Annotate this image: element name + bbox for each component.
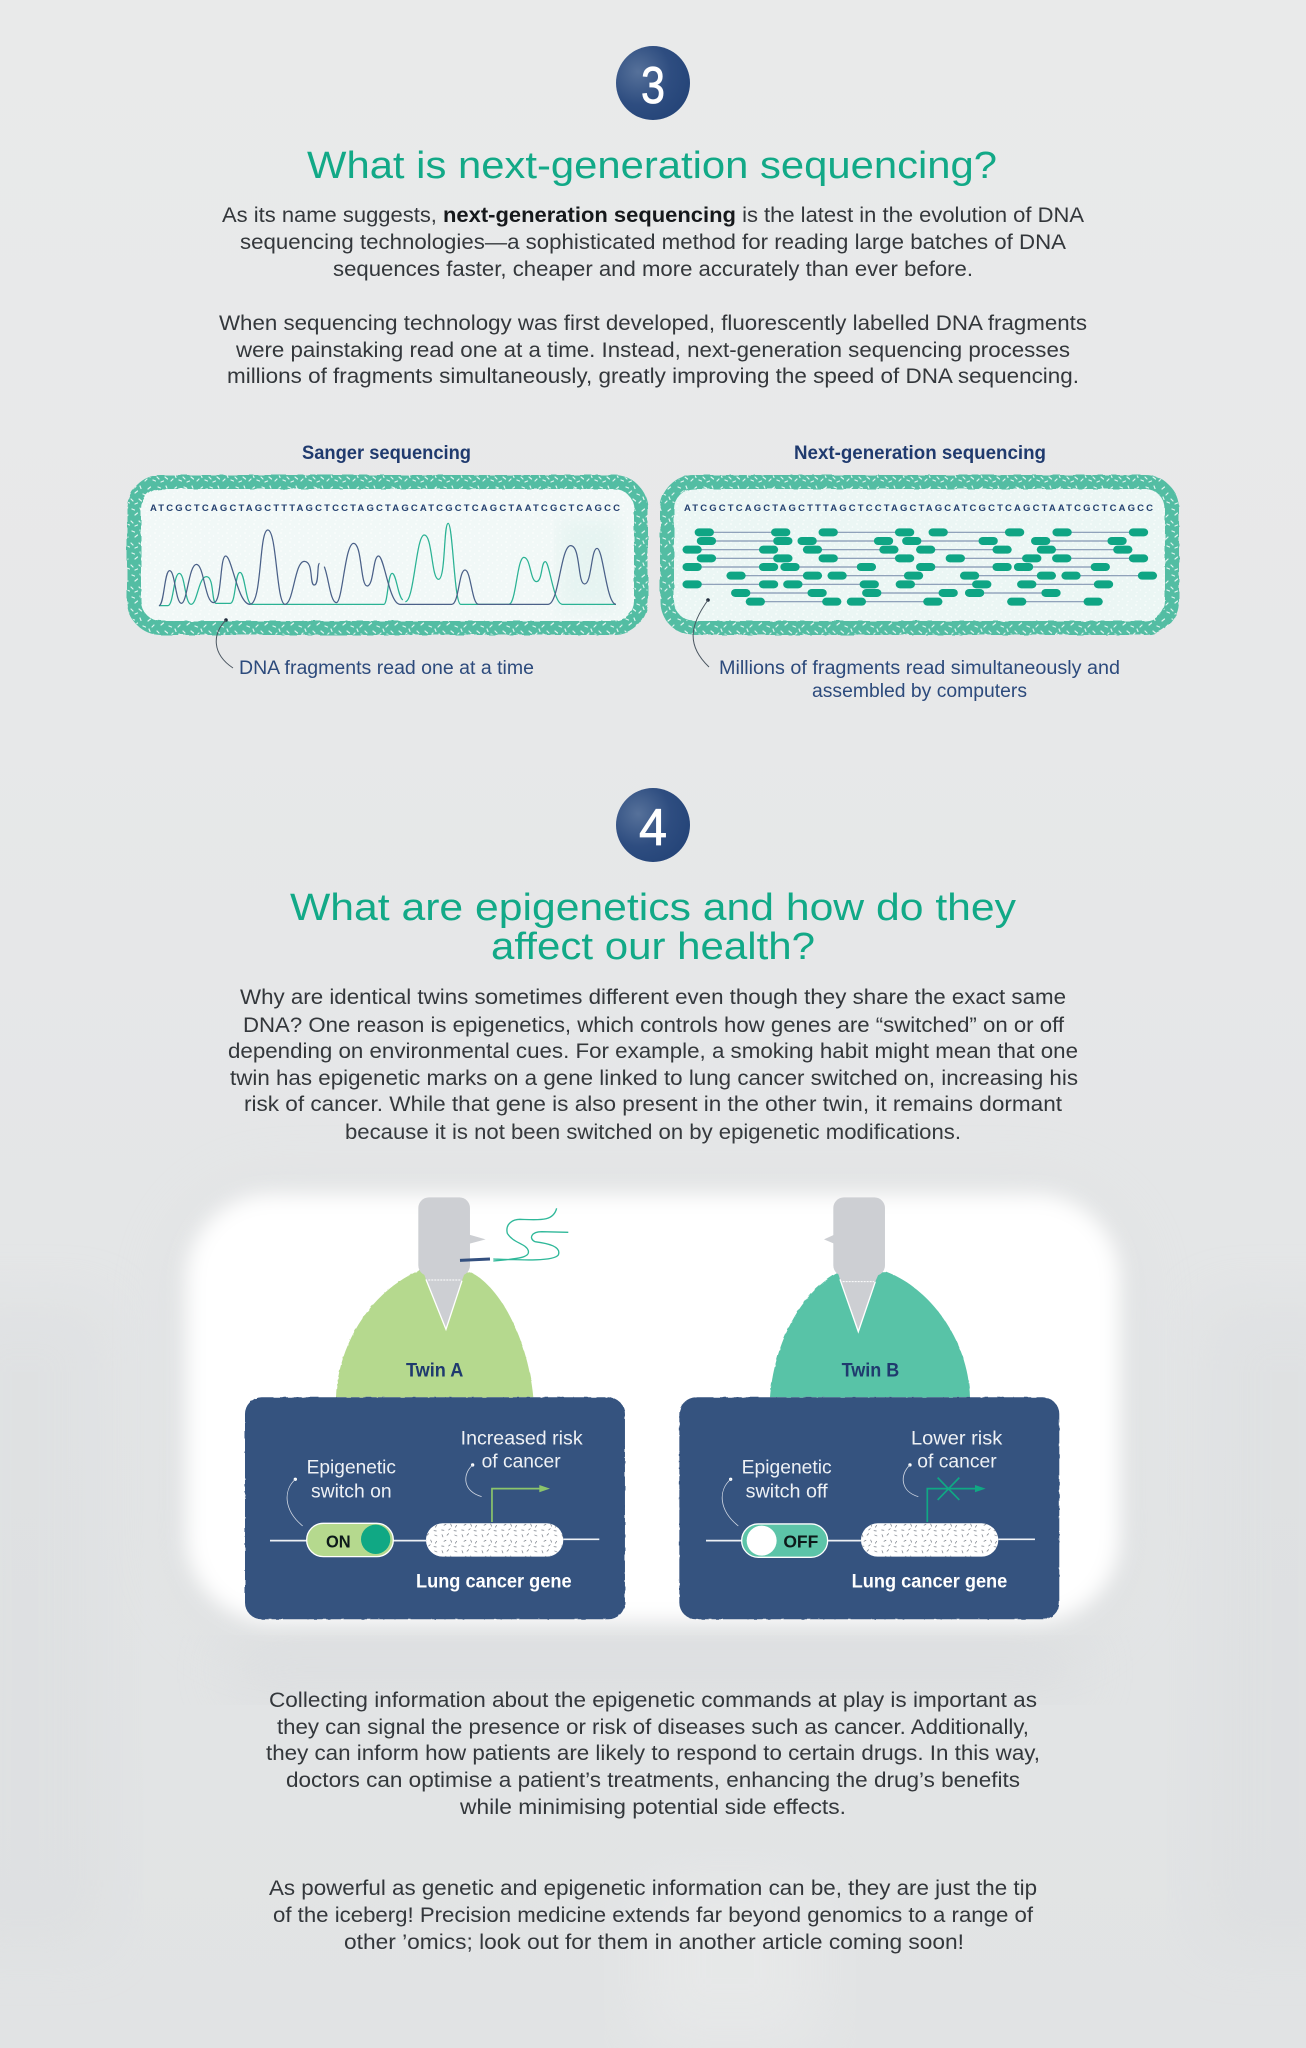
section 4 heading: What are epigenetics and how do they [290,887,1016,929]
risk label: of cancer [917,1452,997,1473]
DNA strand [706,1539,1035,1541]
NGS callout [693,598,1120,702]
Twin B body [770,1272,970,1397]
gene block [426,1523,563,1557]
section 4 heading: affect our health? [491,926,815,968]
section 4 intro text [228,986,1078,1144]
panel: Twin B gene [679,1397,1059,1619]
switch label: switch off [746,1481,828,1502]
Sanger callout: DNA fragments read one at a time [239,658,534,679]
switch label [722,1457,832,1526]
DNA strand [270,1539,599,1541]
risk label: Increased risk [461,1428,583,1449]
section 3 intro text: When sequencing technology was first developed, fluorescently labelled DNA fragments [219,312,1087,335]
closing text: epigenetic commands: they can signal the presence or risk of diseases such as cancer. Additionally, [277,1716,1029,1739]
switch label: Epigenetic [307,1457,396,1478]
Sanger heading: Sanger sequencing [302,443,471,464]
closing text: epigenetic commands: while minimising potential side effects. [459,1796,846,1819]
risk label [461,1428,583,1497]
switch label: Epigenetic [742,1457,832,1478]
Sanger frame [134,482,641,628]
closing text: epigenetic commands: Collecting information about the epigenetic commands at play is important as [269,1689,1037,1712]
epigenetic switch on [307,1523,393,1557]
epigenetic switch on: ON [326,1532,351,1552]
section 3 heading: What is next-generation sequencing? [307,145,997,187]
gene label: Lung cancer gene [416,1572,572,1593]
smoke [493,1208,568,1261]
switch label [287,1457,396,1526]
closing text: epigenetic commands: doctors can optimise a patient’s treatments, enhancing the drug’s benefits [286,1769,1020,1792]
section 4 heading [290,887,1016,968]
panel: Sanger sequencing [134,443,641,679]
expression arrow [492,1485,550,1522]
section 4 intro text: depending on environmental cues. For example, a smoking habit might mean that one [228,1040,1078,1063]
risk label [903,1428,1003,1497]
Twin A head [418,1197,486,1329]
closing text: beyond genomics: of the iceberg! Precision medicine extends far beyond genomics to a range of [273,1904,1033,1927]
NGS callout: assembled by computers [812,681,1027,702]
section 4 intro text: twin has epigenetic marks on a gene linked to lung cancer switched on, increasing his [230,1067,1078,1090]
Twin A body [336,1270,533,1397]
switch label: switch on [311,1481,392,1502]
section 3 number badge: 3 [641,57,665,115]
chromatogram traces [159,523,616,606]
twin B illustration [770,1197,970,1397]
section 3 intro text: were painstaking read one at a time. Instead, next-generation sequencing processes [235,339,1070,362]
section 4 intro text: because it is not been switched on by epigenetic modifications. [345,1121,961,1144]
NGS callout: Millions of fragments read simultaneously and [719,658,1120,679]
white glow behind twins [165,1178,1140,1653]
Twin B head [824,1197,885,1332]
section 3 number badge [616,46,690,120]
fragment reads [682,528,1157,606]
cigarette [460,1259,490,1260]
base sequence: ATCGCTCAGCTAGCTTTAGCTCCTAGCTAGCATCGCTCAGCTAATCGCTCAGCC [150,503,620,514]
panel background [245,1397,625,1619]
gene label: Lung cancer gene [852,1572,1007,1593]
panel: Twin A gene [245,1397,625,1619]
closing text: beyond genomics [269,1877,1037,1954]
panel: next-generation sequencing [667,443,1172,702]
section 3 intro text: As its name suggests, next-generation sequencing is the latest in the evolution of DNA [222,204,1084,227]
section 3 intro text: sequencing technologies—a sophisticated method for reading large batches of DNA [240,231,1066,254]
NGS frame [667,482,1172,628]
gene block [861,1523,998,1557]
section 3 intro text [219,204,1087,388]
closing text: beyond genomics: other ’omics; look out for them in another article coming soon! [344,1931,964,1954]
closing text: epigenetic commands [266,1689,1040,1819]
section 4 intro text: DNA? One reason is epigenetics, which controls how genes are “switched” on or off [243,1014,1064,1037]
blocked expression arrow [927,1478,986,1522]
risk label: of cancer [482,1452,561,1473]
base sequence: ATCGCTCAGCTAGCTTTAGCTCCTAGCTAGCATCGCTCAGCTAATCGCTCAGCC [684,503,1153,514]
NGS heading: Next-generation sequencing [794,443,1046,464]
Twin B label: Twin B [842,1361,899,1382]
Sanger callout [216,618,534,679]
section 4 intro text: Why are identical twins sometimes different even though they share the exact same [240,986,1066,1009]
twin A illustration [336,1197,568,1397]
section 3 intro text: sequences faster, cheaper and more accurately than ever before. [333,258,973,281]
epigenetic switch off: OFF [783,1532,818,1552]
panel background [679,1397,1059,1619]
risk label: Lower risk [911,1428,1003,1449]
closing text: epigenetic commands: they can inform how patients are likely to respond to certain drugs. In this way, [266,1742,1040,1765]
section 4 number badge [616,788,690,862]
section 3 intro text: millions of fragments simultaneously, greatly improving the speed of DNA sequencing. [227,365,1079,388]
epigenetic switch off [742,1524,828,1557]
section 4 intro text: risk of cancer. While that gene is also present in the other twin, it remains dormant [244,1093,1062,1116]
closing text: beyond genomics: As powerful as genetic and epigenetic information can be, they are just the tip [269,1877,1037,1900]
section 4 number badge: 4 [639,799,667,857]
Twin A label: Twin A [406,1361,464,1382]
